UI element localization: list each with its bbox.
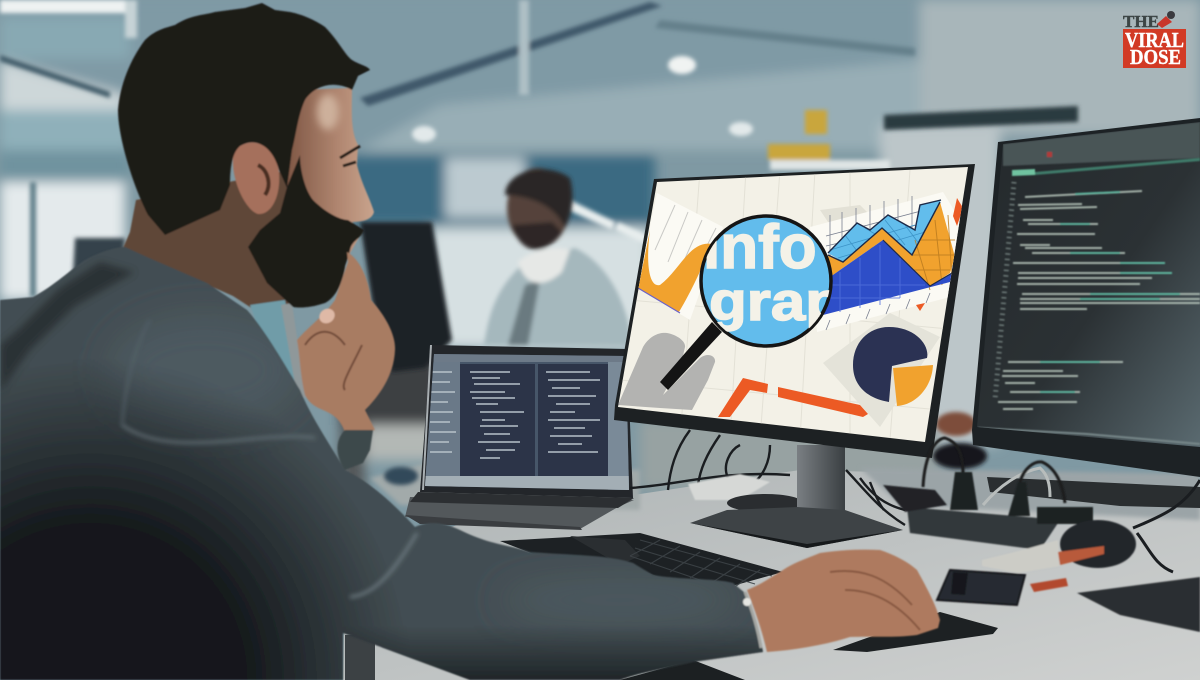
- forehead highlight: [317, 94, 339, 130]
- cables behind monitors: [630, 430, 1200, 572]
- logo box: [1123, 29, 1186, 68]
- background person: [484, 168, 632, 346]
- beard: [248, 155, 364, 308]
- background hand and mouse behind right monitor: [933, 412, 987, 469]
- right monitor: [972, 118, 1200, 477]
- mouse pad: [833, 612, 998, 652]
- orange arrow shape: [718, 378, 768, 417]
- editor toolbar: [1003, 122, 1200, 166]
- magnifier text: info: [703, 213, 817, 282]
- area chart panel: [810, 192, 960, 332]
- watch: [745, 592, 761, 648]
- left chart panel: [637, 193, 723, 320]
- logo word VIRAL: VIRAL: [1125, 28, 1184, 52]
- line numbers: [995, 182, 1014, 400]
- black cable bundle: [1060, 520, 1136, 568]
- hoodie body and arm: [0, 247, 763, 680]
- pie chart panel: [823, 313, 940, 427]
- neck: [123, 170, 295, 318]
- laptop: [405, 345, 635, 530]
- logo word DOSE: DOSE: [1130, 45, 1181, 69]
- background dark monitor: [360, 222, 452, 372]
- arm shadow: [620, 660, 745, 680]
- plugs and cords: [950, 472, 978, 510]
- soft shadow: [820, 205, 867, 222]
- ear: [233, 142, 279, 214]
- face: [285, 88, 374, 300]
- desk adapters: [688, 474, 770, 500]
- torso shadow: [0, 376, 386, 680]
- power strip: [907, 507, 1060, 550]
- hand on mouse: [747, 550, 940, 652]
- desk: [343, 470, 1200, 680]
- orange accent: [953, 198, 963, 226]
- logo word THE: THE: [1123, 12, 1159, 31]
- logo microphone: [1157, 11, 1175, 28]
- right monitor keyboard: [987, 477, 1200, 508]
- center monitor: [610, 160, 980, 458]
- man: [0, 3, 940, 680]
- hood fold: [0, 262, 135, 392]
- hand at chin: [297, 252, 395, 432]
- keyboard: [500, 533, 783, 606]
- monitor screen: [618, 167, 968, 442]
- hoodie lighting: [0, 262, 763, 680]
- gloved hand: [618, 333, 715, 410]
- power strip and gadgets: [883, 438, 1200, 632]
- sleeve cuff at chin: [338, 430, 373, 470]
- magnifier handle: [660, 322, 722, 390]
- hair: [118, 3, 370, 235]
- white cable: [983, 468, 1050, 505]
- lower arm shadow: [364, 634, 763, 680]
- magnifier: grap: [709, 272, 843, 332]
- charger: [982, 540, 1060, 573]
- center monitor stand: [690, 445, 903, 548]
- laptop base: [405, 497, 634, 529]
- background person body: [484, 248, 632, 346]
- blurred desk mouse: [384, 467, 418, 485]
- stand collar: [727, 494, 803, 512]
- laptop lid: [420, 345, 633, 498]
- logo: [1123, 11, 1186, 69]
- monitor bezel: [614, 164, 975, 458]
- fingertip: [316, 306, 338, 326]
- phone: [937, 570, 1025, 605]
- shirt collar: [250, 300, 304, 395]
- pie chart: [853, 327, 927, 402]
- code lines: [998, 191, 1200, 409]
- eyebrow and eye: [340, 146, 360, 166]
- magnifier: [701, 213, 843, 346]
- tablet: [1077, 577, 1200, 632]
